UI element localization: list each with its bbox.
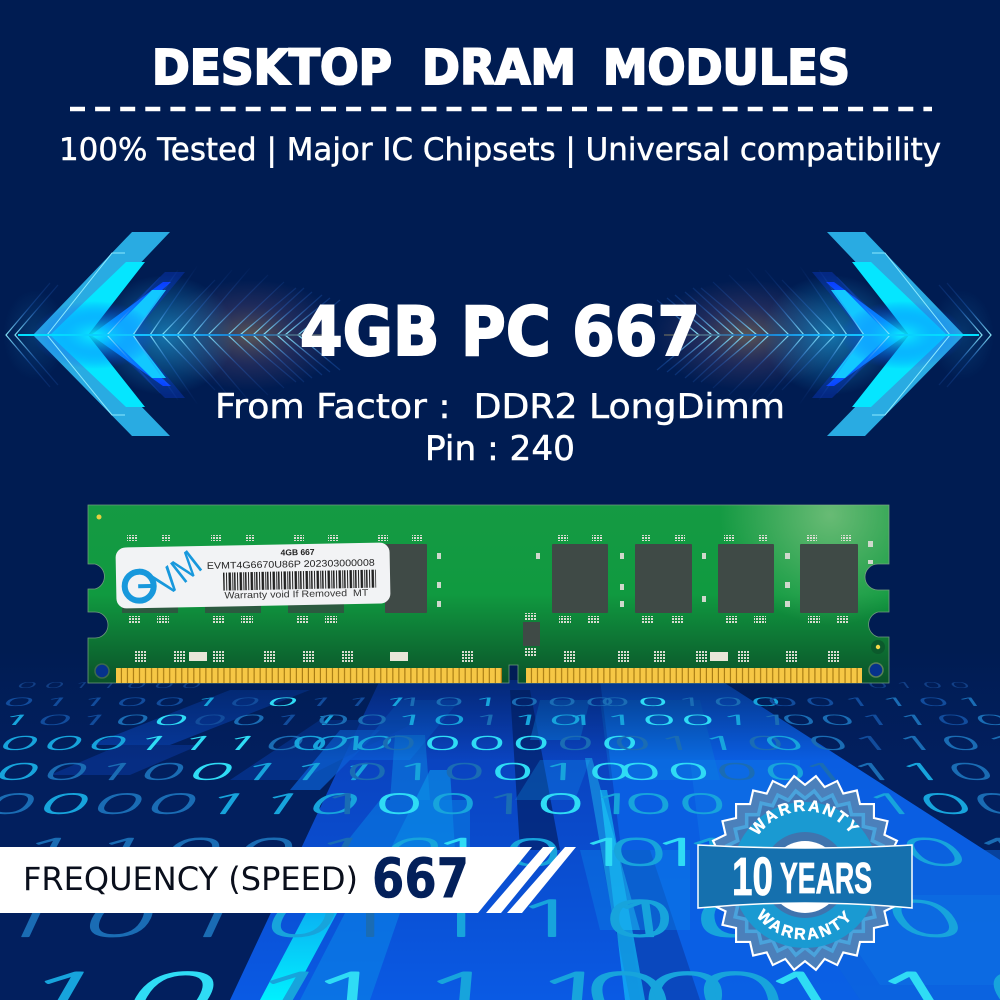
binary digit rows: 00 [622,790,733,818]
binary digit rows: 110011 [564,713,798,727]
binary digit rows: 001101 [763,696,998,708]
title: DRAM [422,40,576,96]
binary digit rows [0,682,1000,1000]
years text: YEARS [780,854,872,903]
barcode [223,570,376,591]
frequency value: 667 [372,847,469,910]
white slanted stripes [486,847,576,913]
RAM module [88,505,889,683]
binary digit rows: 0 [873,894,996,944]
frequency label: FREQUENCY (SPEED) [23,860,358,898]
binary digit rows: 110010 [7,834,464,871]
title [152,40,850,96]
warranty badge [697,774,913,972]
form factor text: From Factor : DDR2 LongDimm [215,387,785,427]
ribbon [698,845,912,908]
sticker text: 4GB 667 [280,547,315,557]
warranty arc text top: WARRANTY [748,800,860,834]
warranty arc text bottom: WARRANTY [758,908,850,940]
dashed divider [70,107,932,111]
binary digit rows: 100101 [320,790,644,818]
solder pads and SMD parts [127,535,873,662]
scalloped seal [707,775,903,971]
binary digit rows: 0110 [611,734,793,753]
binary digit rows: 01100100111 [0,696,423,708]
digital binary floor [0,640,1000,1000]
left chevron arrow [3,232,345,436]
binary digit rows: 010010 [345,760,637,783]
circuit board [88,505,889,683]
binary digit rows: 1011 [430,834,722,872]
binary digit rows: 0100 [866,682,980,689]
product sticker [115,538,391,609]
warranty note: Warranty void If Removed MT [224,588,369,602]
years text [732,847,872,907]
EVM logo: VM [146,542,209,604]
binary digit rows: 11100 [330,895,785,945]
binary digit rows: 0011000 [14,682,212,689]
binary digit rows: 000111000 [0,734,407,753]
title: MODULES [603,40,850,96]
binary digit rows: 01 [605,834,757,872]
product sticker: EVMT4G6670U86P 202303000008 [207,558,375,572]
white band shape [0,847,532,913]
binary digit rows: 101000011 [0,713,354,727]
binary digit rows: 01000000 [290,734,646,753]
product heading: 4GB PC 667 [300,293,700,372]
binary digit rows: 0010110 [315,713,589,727]
binary digit rows: 10 [604,895,793,945]
title: DESKTOP [152,40,392,96]
right chevron arrow [652,232,994,436]
EVM logo [124,542,210,605]
gold contact pins [116,668,862,683]
binary digit rows: 0000 [616,761,815,783]
binary digit rows: 00100 [599,697,789,708]
years text: 10 [732,847,773,907]
subtitle: 100% Tested | Major IC Chipsets | Universal compatibility [59,132,941,168]
binary digit rows: 101000 [395,697,623,708]
frequency band [0,847,576,913]
memory chips [122,544,858,646]
pin count text: Pin : 240 [425,429,575,469]
